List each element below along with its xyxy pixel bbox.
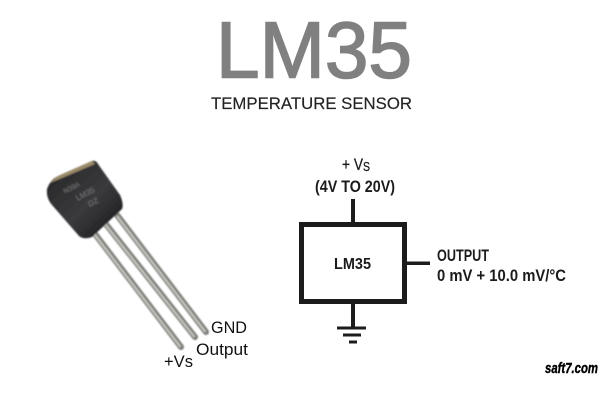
icon: LM35 transistor package photo: [47, 161, 206, 347]
lead: output: [105, 223, 195, 337]
pin label: +Vs: +Vs: [164, 353, 193, 371]
supply range label: (4V TO 20V): [315, 177, 395, 196]
package markings: N39A: [63, 181, 82, 196]
supply label: +Vs: S: [363, 159, 370, 174]
supply label: +Vs: + V: [342, 155, 368, 174]
package markings: DZ: [87, 196, 100, 209]
output pin line: [407, 262, 430, 265]
pin label: Output: Output: [196, 341, 248, 359]
ground symbol: [337, 303, 366, 344]
package markings: [63, 176, 102, 216]
package markings: LM35: [74, 185, 97, 203]
supply pin line: [351, 199, 355, 223]
schematic diagram: [302, 155, 566, 344]
LM35 block: [302, 224, 404, 302]
lead: +Vs: [92, 230, 181, 347]
output label: OUTPUT: [437, 246, 489, 265]
pin label: GND: GND: [211, 319, 247, 337]
block label: LM35: [334, 256, 371, 273]
title: LM35: [216, 6, 412, 94]
subtitle: TEMPERATURE SENSOR: [211, 95, 412, 113]
lead: GND: [117, 215, 206, 332]
package body: [47, 161, 123, 238]
watermark: saft7.com: [545, 360, 598, 377]
output formula: 0 mV + 10.0 mV/°C: [437, 266, 566, 285]
